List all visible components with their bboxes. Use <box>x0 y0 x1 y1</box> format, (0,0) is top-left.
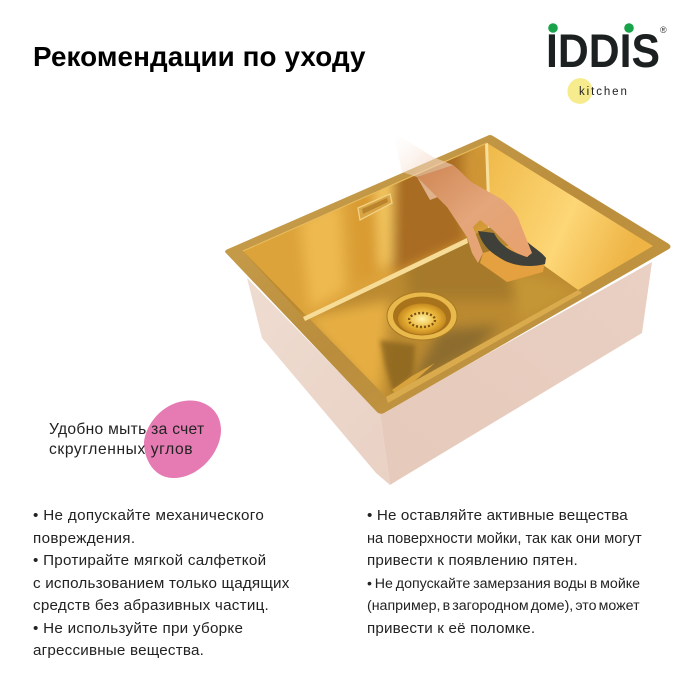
callout: pink blob <box>144 400 221 478</box>
logo green dots <box>548 23 634 33</box>
drain <box>387 292 457 340</box>
left column text: с использованием только щадящих <box>33 574 290 592</box>
left column text: агрессивные вещества. <box>33 642 204 659</box>
left column text: • Протирайте мягкой салфеткой <box>33 552 266 569</box>
sink left face <box>247 278 390 485</box>
left column text: • Не допускайте механического <box>33 507 264 524</box>
right column text: на поверхности мойки, так как они могут <box>367 530 642 546</box>
logo registered mark: ® <box>660 25 667 35</box>
overflow slot <box>358 194 392 220</box>
front rim highlight <box>386 290 582 403</box>
sink illustration <box>225 135 670 485</box>
sink right wall <box>487 143 653 290</box>
logo kitchen text: kitchen <box>579 86 629 98</box>
floor highlight <box>303 238 468 321</box>
arm fading <box>393 132 470 200</box>
sink rim <box>225 135 670 414</box>
callout text: скругленных углов <box>49 441 193 458</box>
logo wordmark: IDDIS <box>546 24 660 77</box>
hand with sponge <box>393 132 546 282</box>
right column text: привести к появлению пятен. <box>367 552 578 569</box>
left column text: средств без абразивных частиц. <box>33 597 269 614</box>
left column text: • Не используйте при уборке <box>33 620 243 636</box>
sink back wall <box>244 144 488 316</box>
sponge <box>480 245 545 282</box>
sink front face <box>380 262 652 485</box>
callout text <box>49 421 204 458</box>
right column text <box>367 507 642 636</box>
opening edge highlight <box>243 143 487 251</box>
right column text: • Не оставляйте активные вещества <box>367 507 628 524</box>
sponge dark pad <box>478 231 546 266</box>
floor dark reflection <box>380 340 415 392</box>
logo: IDDIS kitchen <box>546 23 667 104</box>
title: Рекомендации по уходу <box>33 41 366 72</box>
right column text: (например, в загородном доме), это может <box>367 598 640 614</box>
callout text: Удобно мыть за счет <box>49 421 204 438</box>
back corner highlight <box>485 143 491 228</box>
left column text <box>33 507 290 659</box>
logo yellow blob <box>563 74 597 108</box>
right column text: • Не допускайте замерзания воды в мойке <box>367 576 640 592</box>
right column text: привести к её поломке. <box>367 620 535 636</box>
sink floor <box>240 220 585 400</box>
left column text: повреждения. <box>33 530 135 546</box>
hand <box>417 165 532 263</box>
